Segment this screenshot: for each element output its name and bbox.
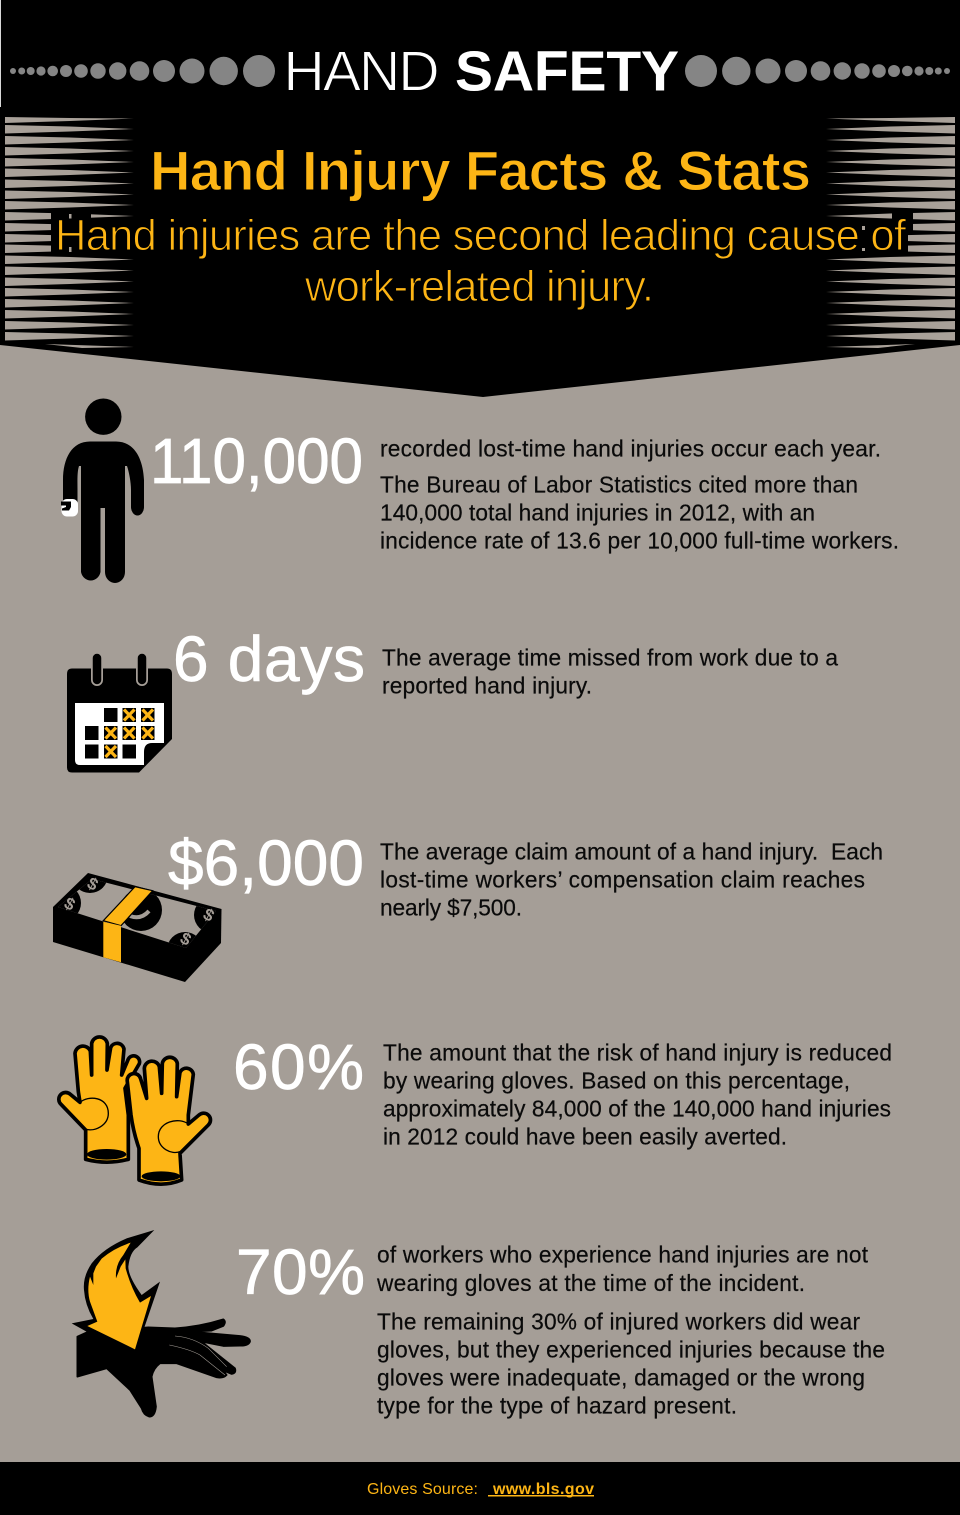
icon: burning hand [72, 1230, 250, 1417]
text: time missed: The average time missed from work due to a [382, 644, 838, 670]
text: not wearing gloves: The remaining 30% of injured workers did wear [377, 1308, 860, 1334]
icon: calendar [67, 658, 172, 772]
stat: 70%: 70% [236, 1236, 365, 1308]
icon: stack of money [53, 873, 222, 982]
text: not wearing gloves: type for the type of hazard present. [377, 1392, 737, 1418]
header stripes right [826, 117, 955, 348]
title: SAFETY [455, 40, 679, 104]
text: recorded injuries: The Bureau of Labor Statistics cited more than [380, 472, 858, 498]
text: claim amount: lost-time workers’ compensation claim reaches [380, 866, 865, 892]
title: HAND [284, 40, 440, 104]
header dots right [685, 55, 950, 87]
icon: stack of money: $ [84, 874, 102, 895]
text: recorded injuries: recorded lost-time hand injuries occur each year. [380, 436, 881, 462]
stat: 110,000: 110,000 [150, 425, 363, 497]
text: gloves reduce risk: The amount that the risk of hand injury is reduced [383, 1040, 892, 1066]
subheading [55, 212, 907, 311]
text: gloves reduce risk: by wearing gloves. Based on this percentage, [383, 1068, 850, 1094]
subheading: work-related injury. [304, 263, 654, 311]
stat: 60%: 60% [233, 1031, 364, 1103]
footer source: Gloves Source: [367, 1481, 478, 1498]
icon: stack of money: $ [61, 894, 79, 915]
header dots left [10, 55, 275, 87]
text: not wearing gloves: of workers who experience hand injuries are not [377, 1242, 869, 1268]
heading: hand injury facts and stats: Hand Injury Facts & Stats [150, 139, 811, 202]
header stripes left [5, 117, 134, 348]
text: time missed [382, 644, 838, 698]
stat: $6,000: $6,000 [168, 827, 364, 899]
footer source [367, 1481, 594, 1498]
subtitle backing band [51, 211, 913, 254]
text: gloves reduce risk: in 2012 could have been easily averted. [383, 1124, 787, 1150]
text: not wearing gloves: gloves were inadequate, damaged or the wrong [377, 1364, 865, 1390]
text: claim amount [380, 838, 883, 920]
title [284, 40, 679, 104]
icon: stack of money: $ [200, 905, 218, 926]
text: gloves reduce risk [383, 1040, 892, 1150]
panel: body background [0, 345, 960, 1462]
text: claim amount: The average claim amount of a hand injury. Each [380, 838, 883, 864]
icon: stack of money: $ [177, 929, 195, 950]
icon: gloves [59, 1037, 210, 1184]
text: not wearing gloves: gloves, but they experienced injuries because the [377, 1336, 885, 1362]
footer bar [0, 1462, 960, 1515]
text: recorded injuries: 140,000 total hand injuries in 2012, with an [380, 500, 815, 526]
text: gloves reduce risk: approximately 84,000 of the 140,000 hand injuries [383, 1096, 891, 1122]
subheading: Hand injuries are the second leading cause of [55, 212, 907, 260]
stat: 6 days: 6 days [173, 623, 365, 695]
icon: person with injured hand [61, 398, 144, 583]
text: recorded injuries: incidence rate of 13.6 per 10,000 full-time workers. [380, 528, 899, 554]
footer source: www.bls.gov [492, 1481, 594, 1498]
text: not wearing gloves [376, 1242, 885, 1418]
text: recorded injuries [380, 436, 899, 554]
text: not wearing gloves: wearing gloves at the time of the incident. [376, 1270, 805, 1296]
text: claim amount: nearly $7,500. [380, 894, 522, 920]
text: time missed: reported hand injury. [382, 672, 592, 698]
